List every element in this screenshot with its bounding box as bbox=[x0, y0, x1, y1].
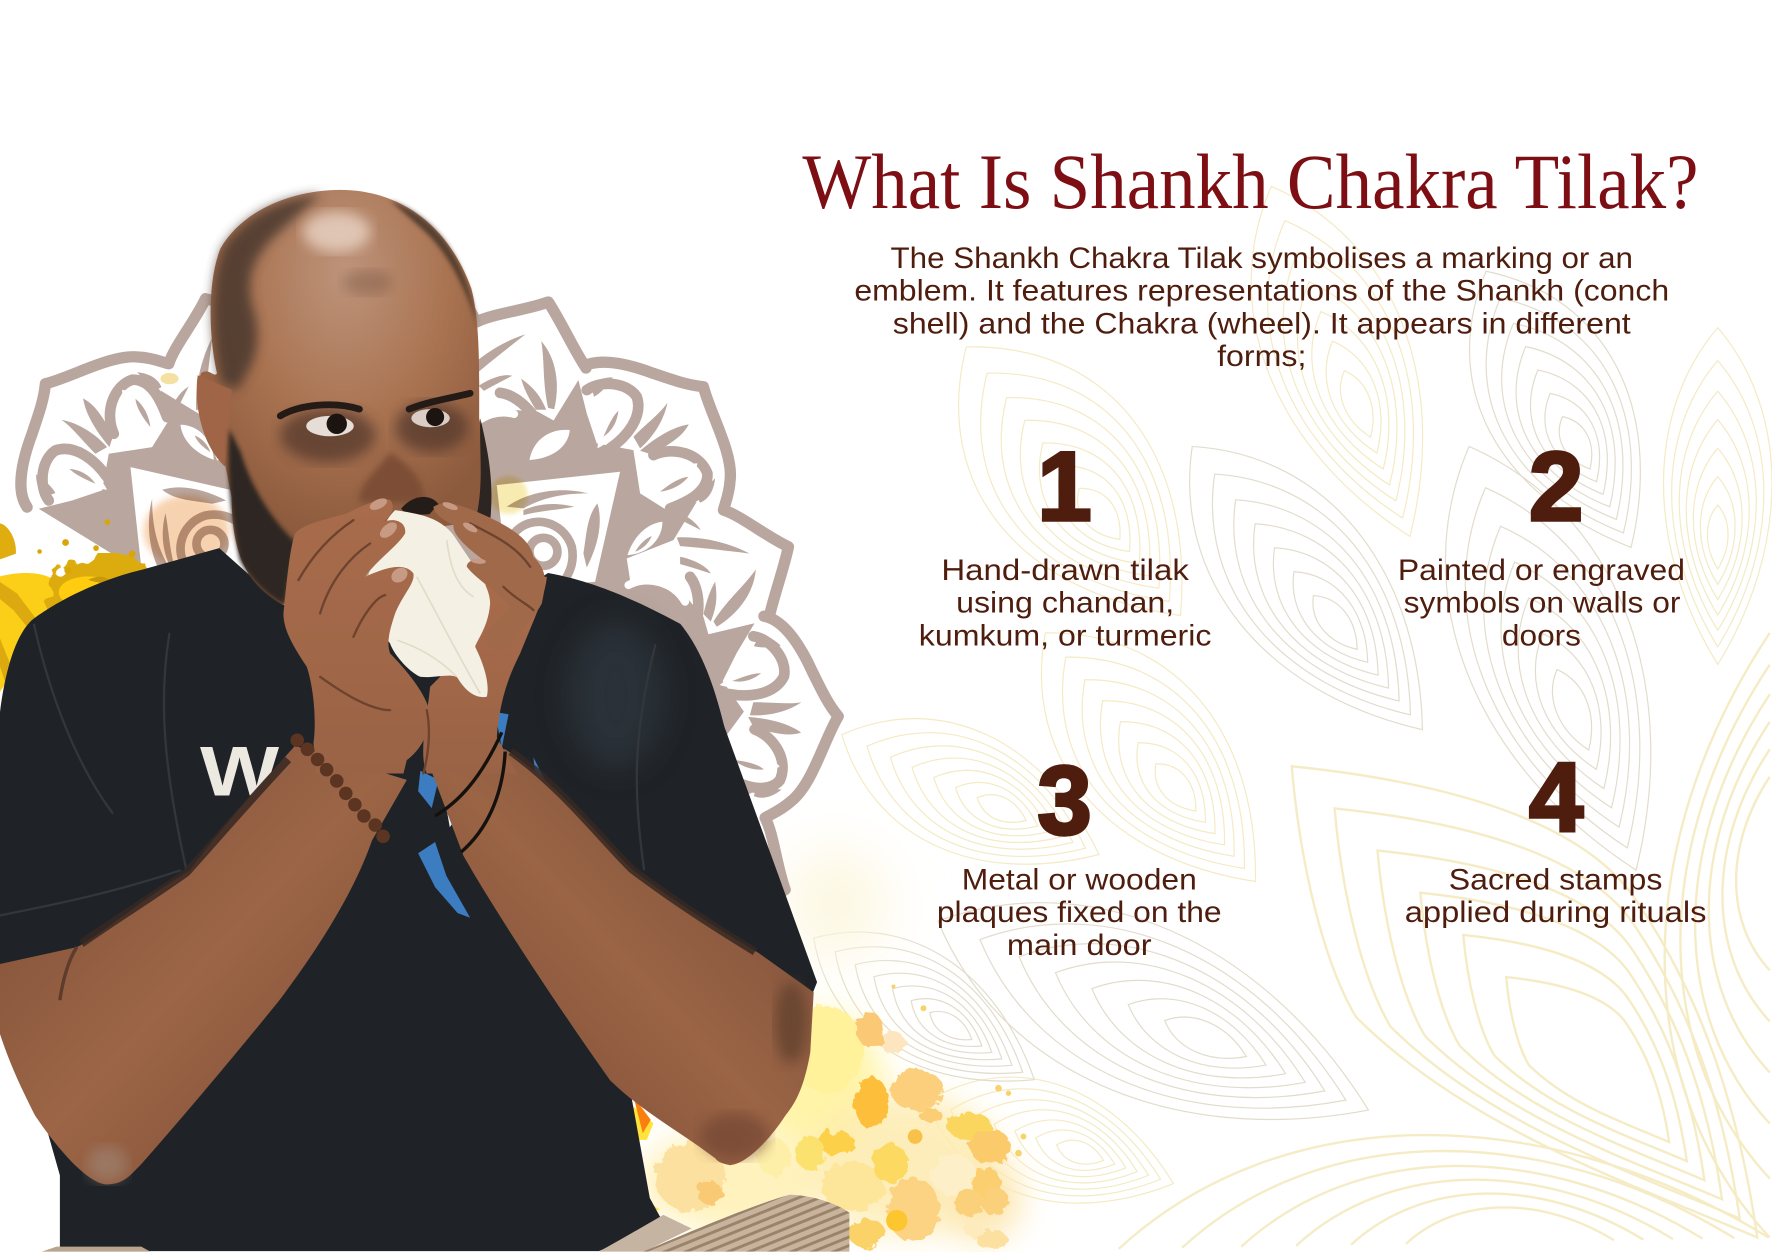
person: head bbox=[197, 190, 491, 605]
watercolour splash: left of the person bbox=[0, 373, 528, 692]
shirt print letter: W bbox=[200, 733, 280, 811]
item 4 bbox=[1405, 743, 1706, 929]
text 1: using chandan, bbox=[956, 587, 1174, 620]
person: black t-shirt bbox=[0, 548, 817, 1251]
text 4 bbox=[1405, 863, 1706, 929]
watercolour splash: bottom bbox=[633, 985, 1026, 1249]
shirt blue print bbox=[418, 712, 549, 918]
text 3: plaques fixed on the bbox=[937, 896, 1222, 929]
title: What Is Shankh Chakra Tilak? bbox=[802, 139, 1699, 225]
background lotus line pattern bbox=[784, 160, 1772, 1249]
item 2 bbox=[1398, 432, 1685, 652]
intro paragraph bbox=[854, 242, 1669, 373]
intro paragraph: forms; bbox=[1217, 340, 1306, 373]
wooden bead bracelet bbox=[290, 733, 390, 843]
person: forearms bbox=[0, 746, 814, 1184]
number 2: 2 bbox=[1529, 432, 1583, 541]
conch shell bbox=[363, 510, 490, 697]
number 1: 1 bbox=[1038, 432, 1092, 541]
stubble on scalp bbox=[213, 194, 322, 390]
scalp highlight bbox=[303, 211, 371, 252]
right-hand fingers bbox=[433, 503, 545, 649]
eyebrows bbox=[280, 405, 359, 416]
intro paragraph: The Shankh Chakra Tilak symbolises a marking or an bbox=[891, 242, 1633, 275]
eyes bbox=[306, 408, 450, 436]
left hand bbox=[283, 499, 430, 773]
text 1: kumkum, or turmeric bbox=[919, 619, 1211, 652]
text 2: symbols on walls or bbox=[1404, 587, 1681, 620]
text 2 bbox=[1398, 554, 1685, 652]
number 4: 4 bbox=[1529, 743, 1583, 852]
beard bbox=[228, 429, 296, 605]
item 3 bbox=[937, 746, 1222, 962]
text 3: main door bbox=[1007, 929, 1152, 962]
text 3: Metal or wooden bbox=[962, 863, 1197, 896]
intro paragraph: shell) and the Chakra (wheel). It appears in different bbox=[893, 307, 1631, 340]
seated legs: corded fabric bbox=[42, 1195, 849, 1252]
eye sockets bbox=[280, 408, 375, 462]
text 1: Hand-drawn tilak bbox=[941, 554, 1189, 587]
nose bbox=[359, 452, 424, 503]
mandala behind the person bbox=[0, 172, 916, 1130]
pale watercolour haze bbox=[639, 848, 1022, 1241]
ear bbox=[197, 375, 232, 467]
text 2: Painted or engraved bbox=[1398, 554, 1685, 587]
person: right hand palm bbox=[423, 577, 547, 773]
text 4: applied during rituals bbox=[1405, 896, 1706, 929]
text 2: doors bbox=[1502, 619, 1581, 652]
black cord bracelets bbox=[435, 732, 505, 852]
text 3 bbox=[937, 863, 1222, 962]
item 1 bbox=[919, 432, 1211, 652]
person: fingers and left hand bbox=[283, 496, 545, 773]
number 3: 3 bbox=[1038, 746, 1092, 855]
intro paragraph: emblem. It features representations of the Shankh (conch bbox=[854, 275, 1669, 308]
text 1 bbox=[919, 554, 1211, 652]
text 4: Sacred stamps bbox=[1449, 863, 1662, 896]
